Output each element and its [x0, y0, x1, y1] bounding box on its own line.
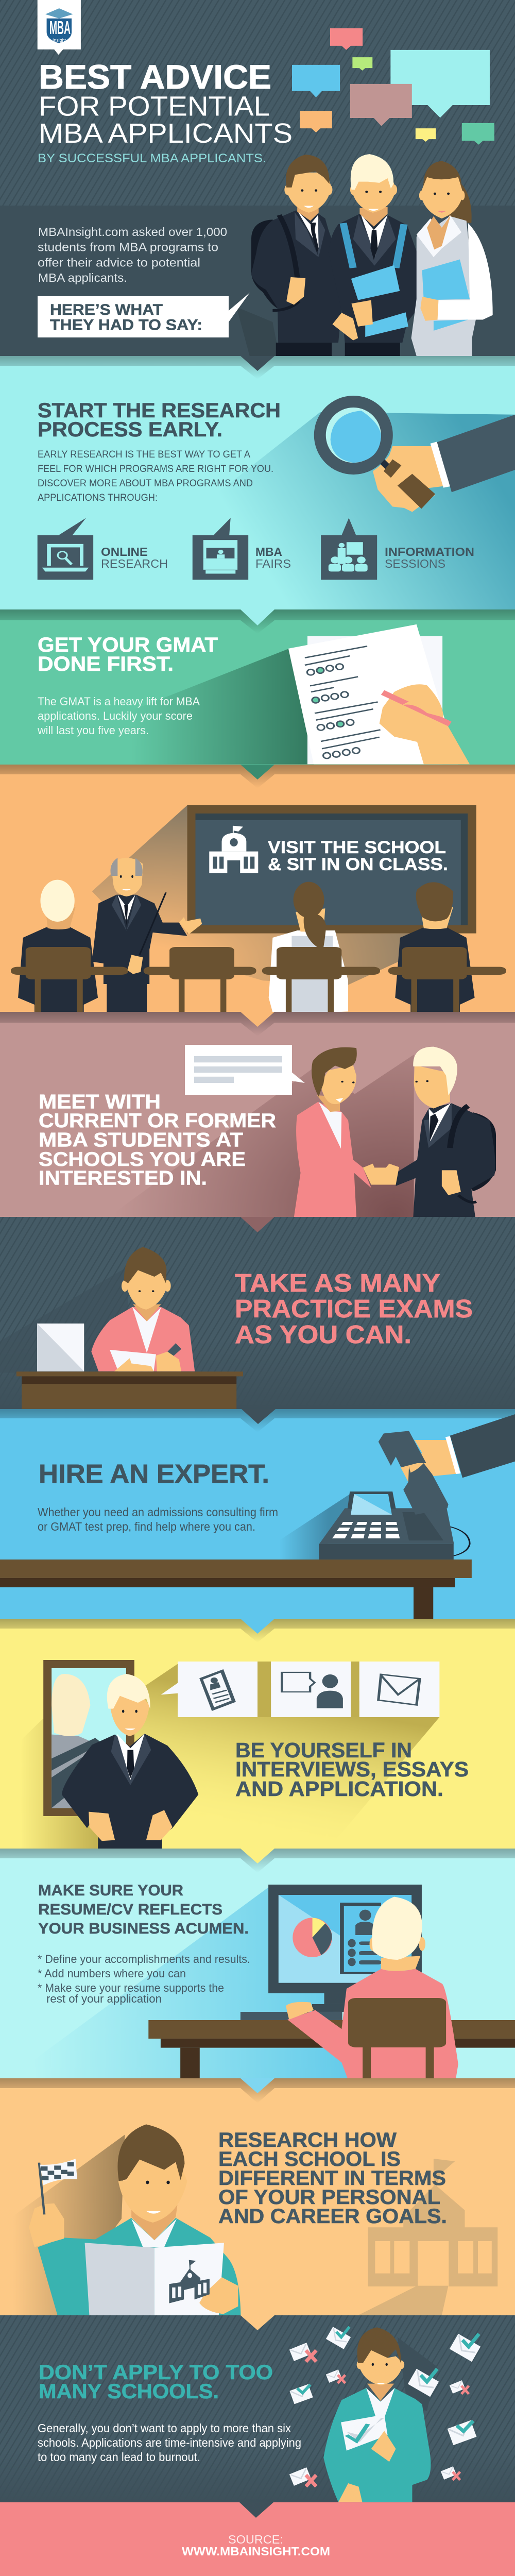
heading: [39, 1091, 276, 1189]
heading: RESUME/CV REFLECTS: [38, 1901, 222, 1918]
three students illustration: [236, 154, 493, 356]
heading: TAKE AS MANY: [235, 1269, 440, 1297]
title: MBA APPLICANTS: [39, 118, 293, 149]
heading: CURRENT OR FORMER: [39, 1110, 276, 1132]
intro paragraph: [38, 225, 227, 284]
icon: envelope: [379, 1674, 420, 1705]
icon: MBA fairs: MBA: [255, 545, 282, 558]
heading: [38, 399, 281, 441]
heading: MANY SCHOOLS.: [39, 2380, 219, 2403]
icon: school: [209, 826, 258, 873]
heading: INTERVIEWS, ESSAYS: [235, 1757, 469, 1781]
callout: here's what they had to say: [38, 293, 250, 337]
icon: MBA fairs: [193, 518, 291, 580]
heading: YOUR BUSINESS ACUMEN.: [38, 1920, 249, 1937]
body text: to too many can lead to burnout.: [38, 2450, 200, 2464]
body text: or GMAT test prep, find help where you can.: [38, 1520, 255, 1533]
desk, computer and person illustration: [33, 1885, 515, 2078]
heading: [235, 1738, 469, 1801]
heading: [235, 1269, 473, 1349]
section: research differences: [0, 2078, 515, 2315]
section: header: [0, 0, 515, 356]
body text: DISCOVER MORE ABOUT MBA PROGRAMS AND: [38, 478, 253, 489]
heading: DIFFERENT IN TERMS: [218, 2167, 446, 2190]
person at desk illustration: [0, 1247, 243, 1409]
icon: online research: ONLINE: [101, 545, 148, 558]
body text: applications. Luckily your score: [38, 709, 193, 722]
mirror, man and icon cards illustration: [21, 1660, 439, 1849]
section: resume: [0, 1849, 515, 2078]
intro paragraph: MBAInsight.com asked over 1,000: [38, 225, 227, 239]
title: FOR POTENTIAL: [39, 91, 270, 122]
body text: [38, 1505, 278, 1533]
intro paragraph: MBA applicants.: [38, 271, 127, 284]
source text: WWW.MBAINSIGHT.COM: [182, 2545, 330, 2558]
body text: [37, 695, 200, 737]
callout: here's what they had to say: HERE’S WHAT: [50, 301, 163, 318]
section: GMAT: [0, 609, 515, 765]
section: visit the school: [0, 765, 515, 1012]
heading: OF YOUR PERSONAL: [218, 2186, 440, 2209]
icon: information sessions: INFORMATION: [385, 545, 474, 558]
heading: PROCESS EARLY.: [38, 418, 222, 441]
bullet list: * Define your accomplishments and results.: [38, 1953, 250, 1965]
heading on chalkboard: & SIT IN ON CLASS.: [268, 855, 448, 874]
body text: [38, 449, 273, 503]
classroom illustration: [11, 805, 506, 1012]
logo badge: Insight: [53, 38, 66, 43]
icon: online research: [38, 518, 168, 580]
logo badge: MBA: [49, 17, 71, 38]
heading: RESEARCH HOW: [218, 2129, 397, 2151]
telephone on table illustration: [0, 1414, 515, 1619]
bullet list: * Add numbers where you can: [38, 1967, 186, 1980]
heading: DON’T APPLY TO TOO: [39, 2361, 273, 2384]
section: practice exams: [0, 1217, 515, 1409]
heading: GET YOUR GMAT: [38, 634, 218, 656]
section: hire an expert: [0, 1409, 515, 1619]
heading: MEET WITH: [39, 1091, 161, 1113]
title: [39, 58, 293, 149]
logo badge: [38, 0, 81, 55]
subtitle: BY SUCCESSFUL MBA APPLICANTS.: [38, 151, 266, 165]
title: BEST ADVICE: [39, 58, 271, 96]
icon: MBA fairs: FAIRS: [255, 557, 291, 570]
heading: SCHOOLS YOU ARE: [39, 1148, 246, 1171]
heading: [39, 2361, 273, 2403]
heading: AND CAREER GOALS.: [218, 2205, 447, 2228]
heading: MAKE SURE YOUR: [38, 1882, 183, 1899]
icon: resume: [199, 1669, 236, 1711]
illustration: ghost school: [358, 2159, 497, 2315]
heading: PRACTICE EXAMS: [235, 1295, 473, 1323]
heading: AND APPLICATION.: [235, 1777, 443, 1801]
intro paragraph: offer their advice to potential: [38, 256, 200, 269]
body text: FEEL FOR WHICH PROGRAMS ARE RIGHT FOR YOU.: [38, 464, 273, 474]
heading on chalkboard: [268, 838, 448, 874]
illustration: person with flag and brochure: [0, 2124, 241, 2315]
body text: [38, 2421, 301, 2464]
section: start the research: [0, 356, 515, 609]
section: meet with students: [0, 1012, 515, 1217]
heading: [38, 634, 218, 675]
magnifying glass and hand: [108, 396, 515, 609]
body text: Generally, you don’t want to apply to more than six: [38, 2421, 291, 2435]
bullet list: [38, 1953, 250, 2005]
heading: [218, 2129, 447, 2228]
icon: information sessions: [321, 518, 474, 580]
source text: [182, 2533, 330, 2558]
icon: online research: RESEARCH: [101, 557, 168, 570]
section: be yourself: [0, 1619, 515, 1849]
section: source footer: [0, 2502, 515, 2576]
body text: EARLY RESEARCH IS THE BEST WAY TO GET A: [38, 449, 250, 460]
heading: START THE RESEARCH: [38, 399, 281, 422]
body text: Whether you need an admissions consulting firm: [38, 1505, 278, 1519]
heading: MBA STUDENTS AT: [39, 1129, 243, 1151]
person holding envelope illustration: [323, 2327, 437, 2502]
heading: BE YOURSELF IN: [235, 1738, 412, 1762]
body text: APPLICATIONS THROUGH:: [38, 493, 158, 503]
speech bubbles: [292, 28, 494, 145]
source text: SOURCE:: [228, 2533, 283, 2546]
section: don't apply to too many schools: [0, 2315, 515, 2502]
heading: DONE FIRST.: [38, 653, 174, 675]
heading on chalkboard: VISIT THE SCHOOL: [268, 838, 446, 857]
intro paragraph: students from MBA programs to: [38, 240, 218, 253]
icon: information sessions: SESSIONS: [385, 557, 445, 570]
handshake illustration: [108, 1045, 496, 1217]
heading: [38, 1882, 249, 1937]
bullet list: * Make sure your resume supports the: [38, 1981, 224, 1994]
heading: INTERESTED IN.: [39, 1167, 207, 1189]
icon: accepted and rejected applications: [289, 2327, 480, 2486]
heading: HIRE AN EXPERT.: [39, 1459, 269, 1488]
body text: schools. Applications are time-intensive and applying: [38, 2436, 301, 2449]
illustration: test paper and hand: [98, 624, 470, 764]
bullet list: rest of your application: [46, 1992, 162, 2005]
heading: AS YOU CAN.: [235, 1321, 411, 1349]
icon: interview: [282, 1672, 343, 1708]
body text: The GMAT is a heavy lift for MBA: [38, 695, 200, 708]
heading: EACH SCHOOL IS: [218, 2148, 401, 2171]
callout: here's what they had to say: THEY HAD TO SAY:: [50, 316, 202, 334]
body text: will last you five years.: [37, 724, 149, 737]
